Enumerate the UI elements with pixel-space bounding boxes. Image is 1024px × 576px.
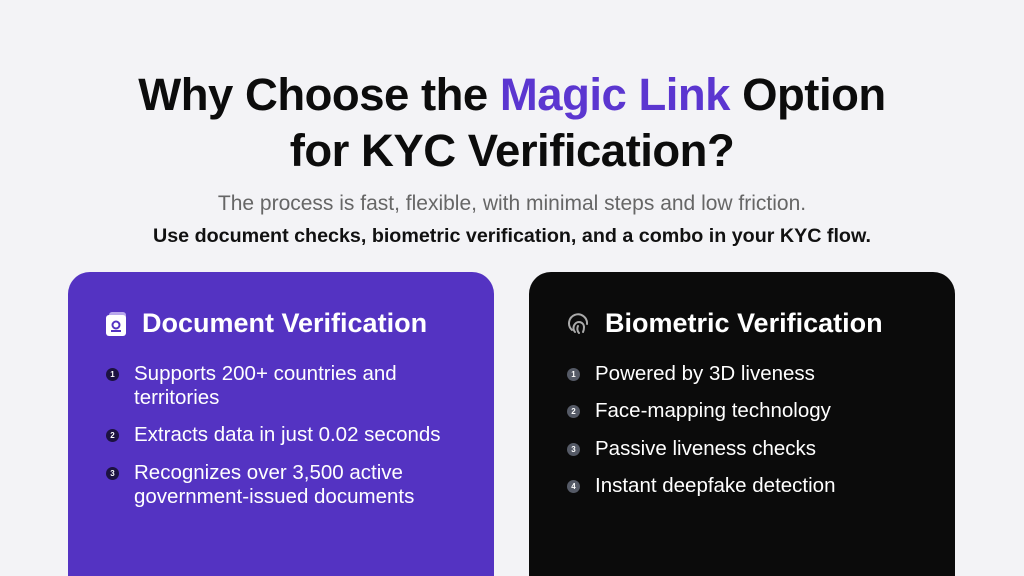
item 1: 1 <box>110 370 115 379</box>
bold subtitle: Use document checks, biometric verification, and a combo in your KYC flow. <box>153 225 871 247</box>
title: for KYC Verification? <box>290 125 734 176</box>
item 3: 3 <box>571 445 576 454</box>
heading: Document Verification <box>142 308 427 338</box>
panel: biometric verification <box>529 272 955 576</box>
item 1: Supports 200+ countries and <box>134 362 397 385</box>
title: Why Choose the Magic Link Option <box>138 69 886 120</box>
item 1: 1 <box>571 370 576 379</box>
item 3 <box>106 461 414 508</box>
title <box>138 69 886 176</box>
heading: Biometric Verification <box>605 308 883 338</box>
item 4: Instant deepfake detection <box>595 474 836 497</box>
subtitle: The process is fast, flexible, with minimal steps and low friction. <box>218 192 806 215</box>
panel: document verification <box>68 272 494 576</box>
item 2: Face-mapping technology <box>595 399 831 422</box>
item 4: 4 <box>571 482 576 491</box>
item 2: 2 <box>571 407 576 416</box>
item 1: Powered by 3D liveness <box>595 362 815 385</box>
item 2: 2 <box>110 431 115 440</box>
item 3: government-issued documents <box>134 485 414 508</box>
item 3: Recognizes over 3,500 active <box>134 461 403 484</box>
item 1 <box>106 362 397 409</box>
item 1: territories <box>134 386 219 409</box>
item 3: Passive liveness checks <box>595 437 816 460</box>
item 2: Extracts data in just 0.02 seconds <box>134 423 441 446</box>
item 3: 3 <box>110 469 115 478</box>
